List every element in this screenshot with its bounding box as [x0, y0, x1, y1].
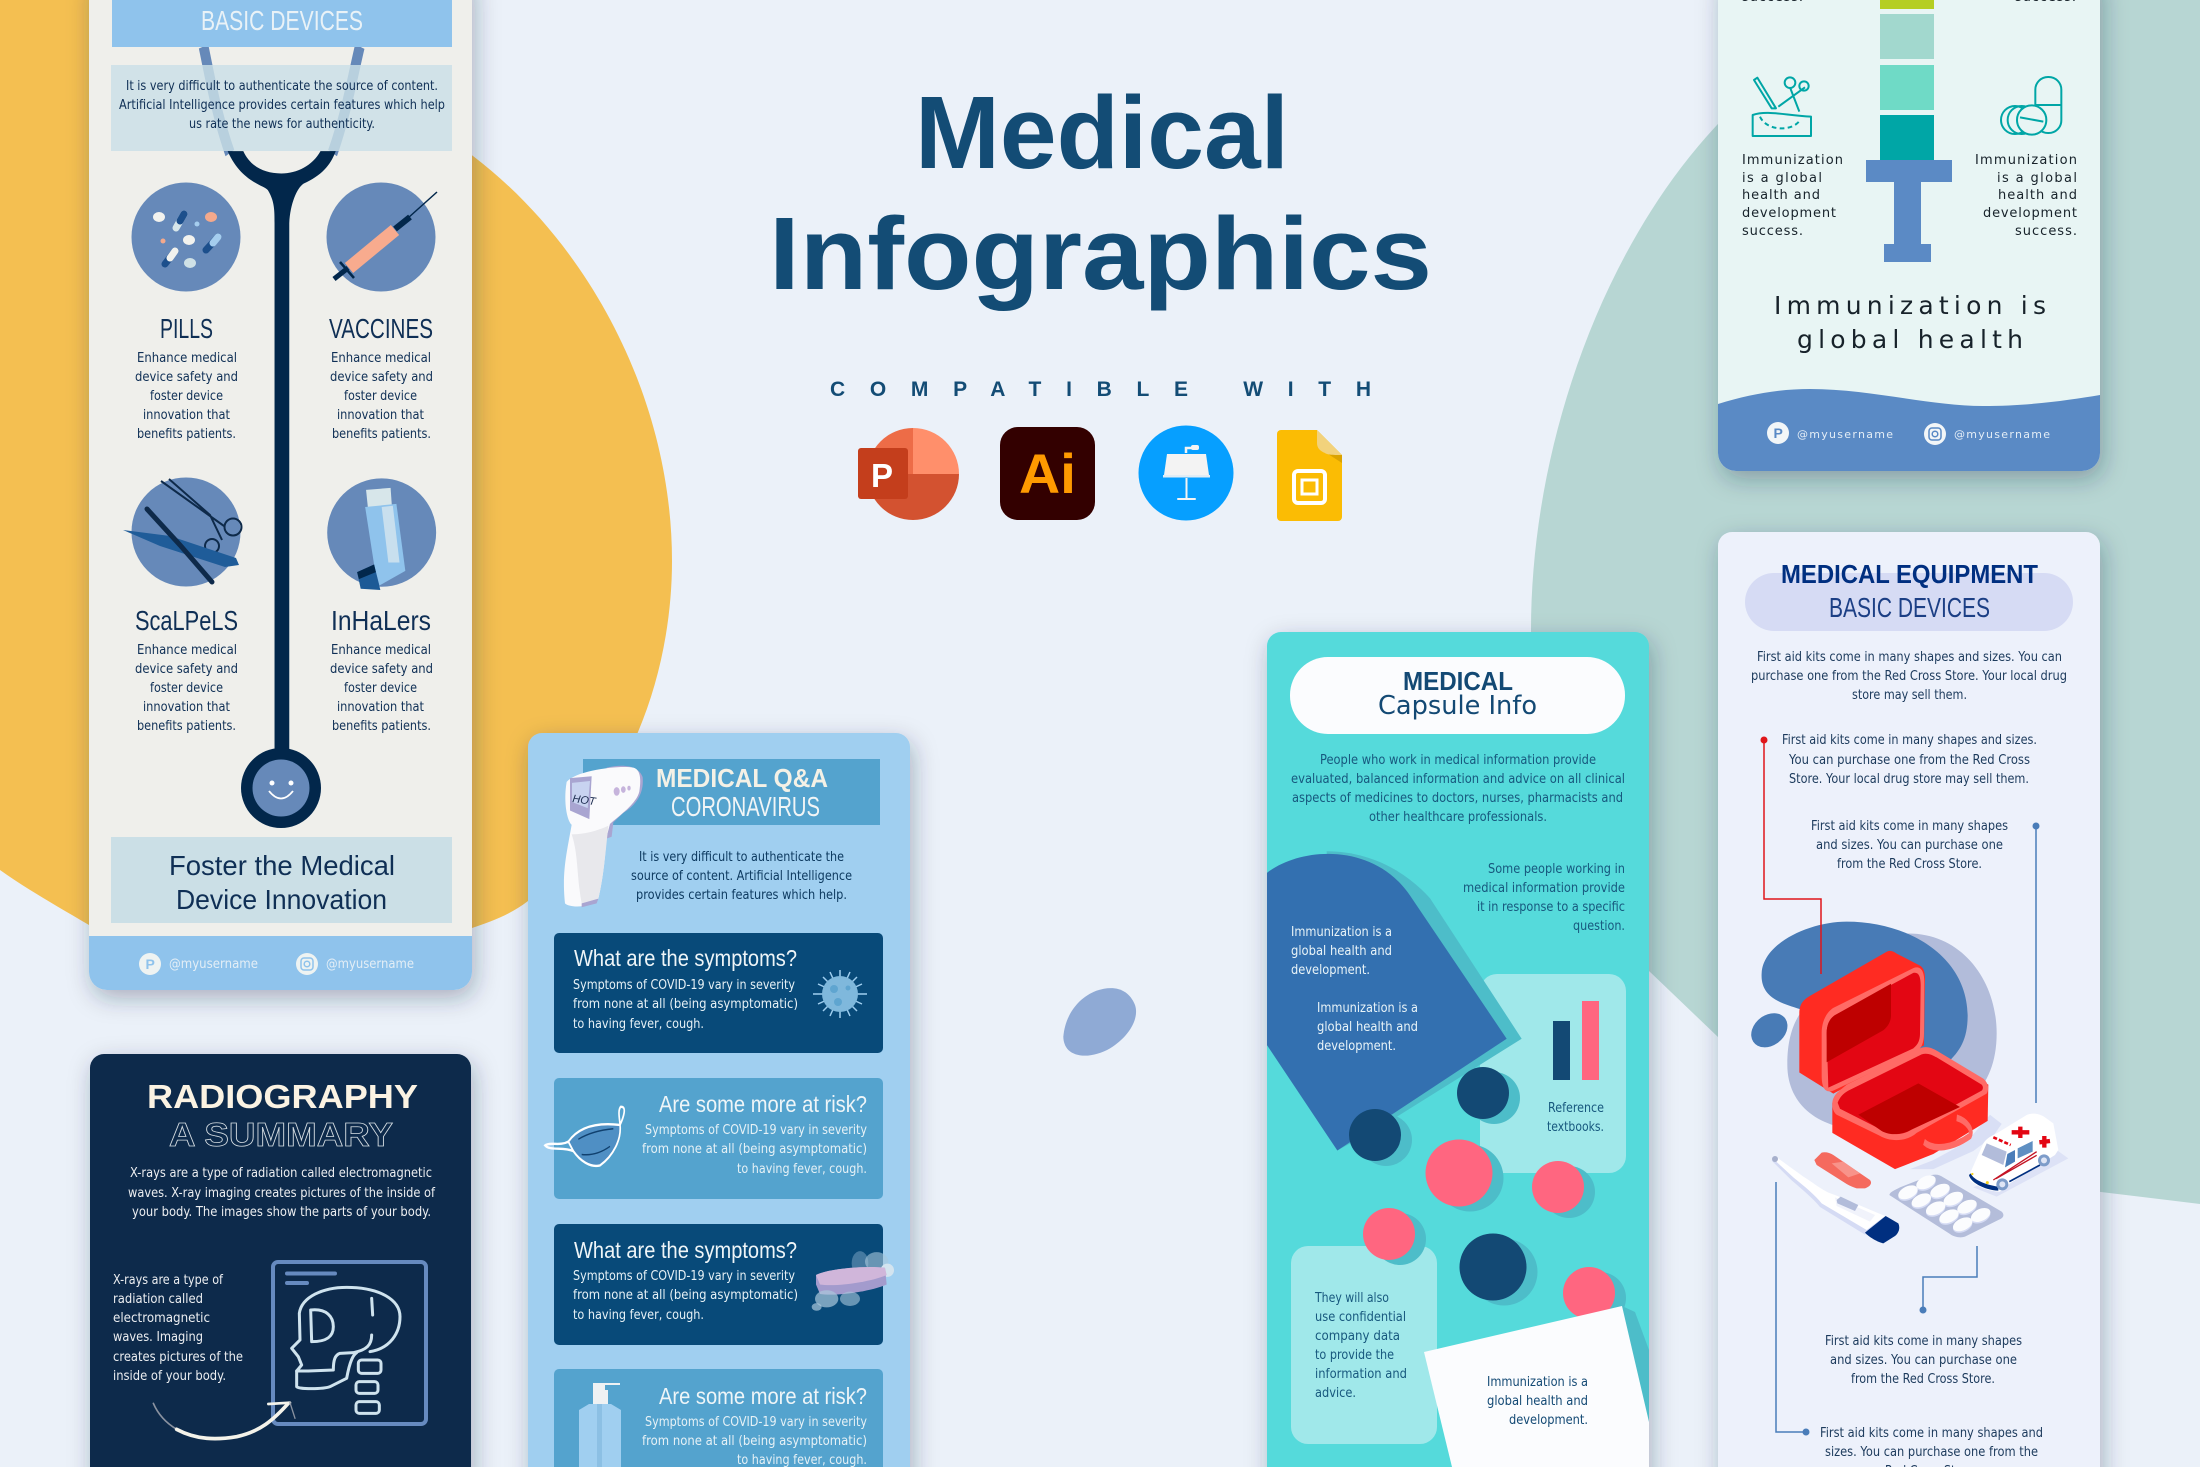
icon: Illustrator: Ai	[1019, 442, 1076, 505]
lower-left panel: use confidential	[1315, 1310, 1406, 1325]
callout text 1	[1782, 733, 2037, 787]
capsule text left: global health and	[1291, 944, 1392, 959]
lower-left panel	[1291, 1246, 1437, 1444]
lower-left panel: to provide the	[1315, 1348, 1394, 1363]
callout text 3: First aid kits come in many shapes	[1825, 1334, 2022, 1349]
social footer: @myusername	[169, 957, 258, 972]
callout text 2: First aid kits come in many shapes	[1811, 819, 2008, 834]
intro text: source of content. Artificial Intelligence	[631, 869, 852, 884]
box: at risk 1: from none at all (being asymptomatic)	[642, 1142, 867, 1157]
label: pills: innovation that	[143, 408, 230, 423]
header	[583, 759, 880, 825]
chest piece with smile	[241, 748, 321, 828]
white note: development.	[1509, 1413, 1588, 1428]
box: at risk 1: Are some more at risk?	[659, 1091, 867, 1117]
icon: face mask	[545, 1107, 624, 1166]
icon: bandage	[1814, 1152, 1871, 1188]
icon: inhaler	[327, 478, 436, 590]
capsule text right: medical information provide	[1463, 881, 1625, 896]
blue callout line right	[2032, 822, 2040, 1103]
capsule text left: development.	[1317, 1039, 1396, 1054]
header pill: Capsule Info	[1378, 691, 1537, 721]
box: symptoms 2	[554, 1224, 894, 1345]
box: symptoms 2: from none at all (being asymptomatic)	[573, 1288, 798, 1303]
label: pills: Enhance medical	[137, 351, 237, 366]
heading: radiography: A SUMMARY	[169, 1116, 393, 1153]
label: scalpels: ScaLPeLS	[135, 605, 238, 636]
intro text	[1751, 650, 2067, 703]
box: symptoms 2: What are the symptoms?	[574, 1237, 797, 1263]
intro text band: Artificial Intelligence provides certain features which help	[119, 98, 445, 113]
intro text: evaluated, balanced information and advice on all clinical	[1291, 772, 1625, 787]
intro text	[631, 850, 852, 903]
box: symptoms 1: from none at all (being asymptomatic)	[573, 997, 798, 1012]
side text	[113, 1273, 243, 1384]
box: at risk 1: Symptoms of COVID-19 vary in severity	[645, 1123, 867, 1138]
lower-left panel: information and	[1315, 1367, 1407, 1382]
intro text: purchase one from the Red Cross Store. Your local drug	[1751, 669, 2067, 684]
white note: global health and	[1487, 1394, 1588, 1409]
icon: blister pack	[1889, 1173, 2003, 1237]
capsule text left: Immunization is a	[1317, 1001, 1418, 1016]
panel: medical capsule card	[1267, 632, 1649, 1467]
box: at risk 1: to having fever, cough.	[737, 1162, 867, 1177]
icon: sanitizer bottle	[579, 1383, 621, 1467]
label: inhalers	[330, 605, 433, 734]
immunization text right: development	[1983, 206, 2077, 221]
icon: vaccine syringe	[326, 182, 437, 292]
immunization text left	[1742, 0, 1843, 239]
label: vaccines: foster device	[344, 389, 417, 404]
intro text band	[111, 65, 452, 151]
icon: infrared thermometer	[564, 766, 643, 907]
header bar	[112, 0, 452, 47]
box: symptoms 2: to having fever, cough.	[573, 1308, 704, 1323]
icon: soap bar	[812, 1251, 894, 1311]
decorative blue blob	[1063, 988, 1136, 1056]
panel: Q&A coronavirus card	[528, 733, 910, 1467]
icon: surgery tools	[1753, 77, 1811, 136]
side text: X-rays are a type of	[113, 1273, 223, 1288]
label: pills: PILLS	[160, 313, 213, 344]
wave footer: P	[1774, 425, 1783, 441]
immunization text right	[1975, 0, 2077, 239]
callout text 3: from the Red Cross Store.	[1851, 1372, 1995, 1387]
title: Infographics	[769, 196, 1432, 311]
label: inhalers: innovation that	[337, 700, 424, 715]
icon: PowerPoint: P	[871, 457, 893, 494]
capsule illustration shape	[1267, 851, 1522, 1151]
box: at risk 1	[545, 1078, 883, 1199]
lower-left panel: They will also	[1314, 1291, 1389, 1306]
box: symptoms 1: to having fever, cough.	[573, 1017, 704, 1032]
panel: immunization card	[1718, 0, 2100, 471]
box: symptoms 1: What are the symptoms?	[574, 945, 797, 971]
intro text: aspects of medicines to doctors, nurses, pharmacists and	[1292, 791, 1623, 806]
side text: creates pictures of the	[113, 1350, 243, 1365]
label: vaccines	[329, 313, 433, 442]
bar chart	[1553, 1001, 1599, 1080]
panel: radiography card	[90, 1054, 471, 1467]
icon: infrared thermometer: HOT	[572, 793, 598, 808]
label: vaccines: innovation that	[337, 408, 424, 423]
label: pills: foster device	[150, 389, 223, 404]
capsule text left	[1291, 925, 1418, 1054]
intro text: your body. The images show the parts of your body.	[132, 1205, 431, 1220]
red callout line	[1760, 736, 1821, 974]
capsule text left: Immunization is a	[1291, 925, 1392, 940]
social footer	[89, 936, 472, 990]
yellow background blob	[0, 0, 672, 965]
heading: radiography	[147, 1078, 418, 1153]
label: vaccines: device safety and	[330, 370, 433, 385]
header: BASIC DEVICES	[1829, 592, 1990, 623]
callout text 3	[1825, 1334, 2022, 1387]
panel: medical equipment card	[1718, 532, 2100, 1467]
label: pills: benefits patients.	[137, 427, 236, 442]
label: inhalers: Enhance medical	[331, 643, 431, 658]
header	[1745, 559, 2073, 631]
closing statement band	[111, 837, 452, 923]
immunization text left: health and	[1742, 188, 1820, 203]
intro text	[128, 1166, 435, 1220]
blue callout line centre	[1920, 1246, 1977, 1314]
box: at risk 2	[554, 1369, 883, 1467]
pills: circles	[1349, 1067, 1626, 1324]
immunization text left: Immunization	[1742, 153, 1843, 168]
icon: Keynote	[1138, 426, 1234, 520]
intro text: provides certain features which help.	[636, 888, 847, 903]
label: vaccines: VACCINES	[329, 313, 433, 344]
label: pills: device safety and	[135, 370, 238, 385]
side text: inside of your body.	[113, 1369, 226, 1384]
x-ray skull illustration	[273, 1262, 426, 1424]
capsule text right: Some people working in	[1488, 862, 1625, 877]
label: inhalers: benefits patients.	[332, 719, 431, 734]
lower-left panel: company data	[1315, 1329, 1400, 1344]
header pill	[1290, 657, 1625, 734]
header: MEDICAL EQUIPMENT	[1781, 559, 2038, 589]
social footer: @myusername	[326, 957, 414, 972]
callout text 3: and sizes. You can purchase one	[1830, 1353, 2017, 1368]
side text: waves. Imaging	[113, 1330, 203, 1345]
closing statement band: Foster the Medical	[169, 850, 395, 881]
callout text 4: sizes. You can purchase one from the	[1825, 1445, 2038, 1460]
first aid kit illustration	[1750, 922, 2002, 1169]
box: symptoms 1: Symptoms of COVID-19 vary in severity	[573, 978, 795, 993]
label: scalpels: benefits patients.	[137, 719, 236, 734]
intro text band: us rate the news for authenticity.	[189, 117, 375, 132]
callout text 1: Store. Your local drug store may sell them.	[1789, 772, 2029, 787]
immunization text right: is a global	[1997, 171, 2077, 186]
callout text 2	[1811, 819, 2008, 872]
immunization text left: success.	[1742, 224, 1803, 239]
teal background blob	[1531, 0, 2200, 1204]
callout text 1: You can purchase one from the Red Cross	[1788, 753, 2030, 768]
stethoscope stem	[228, 151, 336, 753]
heading: radiography: RADIOGRAPHY	[147, 1078, 418, 1115]
label: pills	[135, 313, 238, 442]
label: vaccines: Enhance medical	[331, 351, 431, 366]
immunization text left: is a global	[1742, 171, 1822, 186]
intro text: X-rays are a type of radiation called electromagnetic	[130, 1166, 432, 1181]
intro text: People who work in medical information provide	[1320, 753, 1596, 768]
header: CORONAVIRUS	[671, 791, 820, 822]
blue callout line left	[1776, 1182, 1810, 1436]
intro text: store may sell them.	[1852, 688, 1967, 703]
closing statement band: Device Innovation	[176, 884, 387, 915]
immunization text right: success.	[2015, 224, 2077, 239]
label: scalpels	[135, 605, 238, 734]
title	[769, 75, 1432, 311]
statement: global health	[1797, 325, 2023, 354]
icon: scalpels and scissors	[123, 478, 242, 586]
wave footer	[1718, 389, 2100, 471]
icon: capsules	[2001, 77, 2061, 135]
label: scalpels: innovation that	[143, 700, 230, 715]
label: inhalers: foster device	[344, 681, 417, 696]
white note	[1424, 1306, 1649, 1467]
box: at risk 2: Symptoms of COVID-19 vary in severity	[645, 1415, 867, 1430]
intro text: other healthcare professionals.	[1369, 810, 1547, 825]
stethoscope tubes	[204, 47, 360, 153]
intro text band: It is very difficult to authenticate the source of content.	[126, 79, 438, 94]
box: at risk 2: Are some more at risk?	[659, 1383, 867, 1409]
callout text 2: and sizes. You can purchase one	[1816, 838, 2003, 853]
callout text 4: First aid kits come in many shapes and	[1820, 1426, 2043, 1441]
wave footer: @myusername	[1954, 428, 2050, 441]
lower-left panel: advice.	[1315, 1386, 1356, 1401]
intro text: waves. X-ray imaging creates pictures of the inside of	[128, 1186, 435, 1201]
white note: Immunization is a	[1487, 1375, 1588, 1390]
side text: radiation called	[113, 1292, 203, 1307]
box: symptoms 1	[554, 933, 883, 1053]
label: inhalers: InHaLers	[331, 605, 431, 636]
icon: Illustrator	[1000, 427, 1095, 520]
intro text: It is very difficult to authenticate the	[639, 850, 844, 865]
header pill: MEDICAL	[1403, 666, 1513, 696]
label: scalpels: device safety and	[135, 662, 238, 677]
label: scalpels: foster device	[150, 681, 223, 696]
wave footer: @myusername	[1797, 428, 1893, 441]
immunization text right: health and	[1998, 188, 2077, 203]
capsule text left: development.	[1291, 963, 1370, 978]
icon: pills	[132, 182, 240, 292]
capsule text right	[1463, 862, 1625, 934]
arrow: chalk curve	[153, 1403, 295, 1439]
capsule text right: question.	[1573, 919, 1625, 934]
header bar: BASIC DEVICES	[201, 5, 363, 36]
callout text 4	[1820, 1426, 2043, 1467]
side text: electromagnetic	[113, 1311, 210, 1326]
social footer: P	[146, 956, 155, 972]
thermometer column	[1866, 0, 1952, 262]
callout text 2: from the Red Cross Store.	[1837, 857, 1982, 872]
statement: Immunization is	[1774, 291, 2046, 320]
reference panel: textbooks.	[1547, 1120, 1604, 1135]
panel: basic devices card	[89, 0, 472, 990]
icon: digital thermometer	[1772, 1156, 1899, 1243]
callout text 1: First aid kits come in many shapes and sizes.	[1782, 733, 2037, 748]
intro text	[1291, 753, 1625, 825]
title: Medical	[915, 75, 1289, 190]
label: inhalers: device safety and	[330, 662, 433, 677]
label: vaccines: benefits patients.	[332, 427, 431, 442]
reference panel: Reference	[1548, 1101, 1604, 1116]
icon: ambulance	[1969, 1114, 2068, 1197]
capsule text left: global health and	[1317, 1020, 1418, 1035]
box: at risk 2: from none at all (being asymptomatic)	[642, 1434, 867, 1449]
reference panel	[1480, 974, 1626, 1173]
intro text: First aid kits come in many shapes and sizes. You can	[1757, 650, 2062, 665]
statement	[1774, 291, 2046, 354]
icon: PowerPoint	[858, 428, 959, 520]
box: symptoms 2: Symptoms of COVID-19 vary in severity	[573, 1269, 795, 1284]
immunization text right: Immunization	[1975, 153, 2077, 168]
icon: virus	[813, 970, 867, 1018]
immunization text left: development	[1742, 206, 1836, 221]
label: scalpels: Enhance medical	[137, 643, 237, 658]
compatible with label: COMPATIBLE WITH	[830, 378, 1371, 401]
header: MEDICAL Q&A	[656, 763, 828, 793]
capsule text right: it in response to a specific	[1477, 900, 1625, 915]
icon: Google Slides	[1277, 430, 1342, 521]
